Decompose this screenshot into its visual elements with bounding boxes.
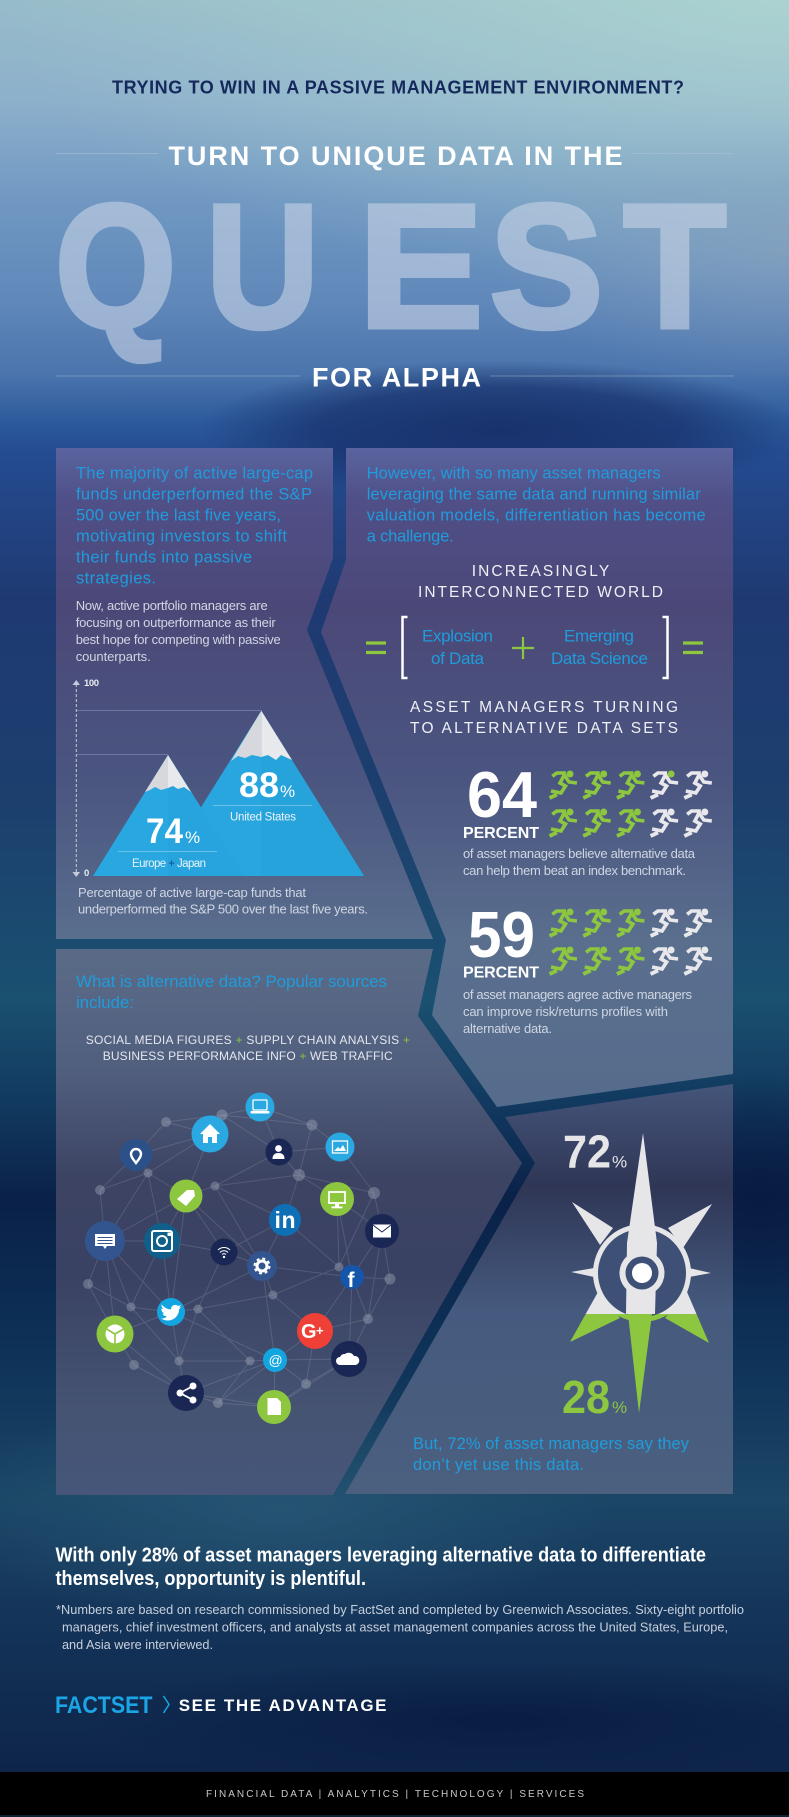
chart caption bbox=[78, 885, 368, 916]
footnote: managers, chief investment officers, and analysts at asset management companies across the United States, Europe, bbox=[62, 1620, 728, 1635]
sources list: SOCIAL MEDIA FIGURES + SUPPLY CHAIN ANALYSIS + bbox=[86, 1033, 410, 1047]
intro text left bbox=[76, 464, 313, 588]
big word QUEST: Q bbox=[55, 169, 176, 365]
intro text right: valuation models, differentiation has become bbox=[367, 506, 706, 524]
icon: home bbox=[192, 1116, 228, 1152]
big word QUEST: S bbox=[490, 168, 603, 365]
mountain: Europe + Japan 74% bbox=[93, 755, 244, 876]
icon: google plus: G bbox=[301, 1321, 317, 1343]
footer bar: FINANCIAL DATA | ANALYTICS | TECHNOLOGY | SERVICES bbox=[206, 1789, 584, 1800]
body text left: focusing on outperformance as their bbox=[76, 615, 276, 630]
icon: google plus bbox=[297, 1313, 333, 1349]
compass percentage 28: % bbox=[612, 1398, 627, 1417]
explosion of data: Explosion bbox=[422, 627, 493, 646]
mountain: Europe + Japan 74%: % bbox=[185, 828, 200, 847]
compass percentage 72: 72 bbox=[563, 1126, 611, 1178]
icon: image bbox=[326, 1132, 354, 1162]
body text left: counterparts. bbox=[76, 649, 151, 664]
top question: TRYING TO WIN IN A PASSIVE MANAGEMENT ENVIRONMENT? bbox=[112, 78, 684, 98]
big word QUEST: E bbox=[358, 168, 484, 365]
runners 59 bbox=[550, 908, 712, 974]
panel: compass bbox=[345, 1084, 733, 1494]
heading: turn to unique data: TURN TO UNIQUE DATA IN THE bbox=[168, 141, 622, 171]
mountain: United States 88%: United States bbox=[230, 812, 296, 824]
icon: box bbox=[96, 1316, 134, 1352]
conclusion bbox=[56, 1545, 706, 1590]
right bracket bbox=[662, 617, 668, 678]
icon: user bbox=[266, 1138, 292, 1166]
icon: at sign bbox=[263, 1348, 287, 1372]
intro text left: The majority of active large-cap bbox=[76, 464, 313, 482]
heading: for alpha: FOR ALPHA bbox=[312, 362, 481, 392]
intro text left: strategies. bbox=[76, 570, 156, 588]
intro text left: their funds into passive bbox=[76, 548, 252, 566]
icon: gear bbox=[247, 1251, 277, 1281]
equation bbox=[366, 617, 703, 678]
compass percentage 28: 28 bbox=[562, 1371, 610, 1423]
icon: share bbox=[168, 1375, 204, 1411]
stat: 59 percent: can improve risk/returns profiles with bbox=[463, 1004, 668, 1019]
left bracket bbox=[402, 617, 408, 678]
stat: 59 percent: alternative data. bbox=[463, 1021, 552, 1036]
question text: include: bbox=[76, 993, 134, 1012]
chart axis: 0 bbox=[84, 868, 89, 879]
subheading: interconnected world: INCREASINGLY bbox=[472, 563, 609, 580]
intro text right: leveraging the same data and running similar bbox=[367, 486, 701, 504]
stat: 59 percent: PERCENT bbox=[463, 965, 539, 982]
icon: chevron bbox=[164, 1696, 169, 1713]
subheading: alternative data sets bbox=[410, 699, 678, 737]
icon: tag bbox=[170, 1180, 202, 1212]
panel: differentiation bbox=[321, 448, 733, 1107]
question text: What is alternative data? Popular sources bbox=[76, 972, 387, 991]
explosion of data: of Data bbox=[431, 649, 485, 668]
body text left bbox=[76, 598, 281, 664]
intro text left: funds underperformed the S&P bbox=[76, 486, 312, 504]
panel: underperformance bbox=[56, 448, 433, 939]
stat: 64 percent bbox=[463, 758, 712, 878]
stat: 64 percent: 64 bbox=[467, 758, 537, 831]
footnote: and Asia were interviewed. bbox=[62, 1637, 213, 1652]
footnote: *Numbers are based on research commissioned by FactSet and completed by Greenwich Associates. Sixty-eight portfolio bbox=[56, 1602, 744, 1617]
right equals bbox=[683, 643, 703, 652]
mountain: United States 88% bbox=[158, 711, 364, 876]
chart caption: underperformed the S&P 500 over the last five years. bbox=[78, 901, 368, 916]
chart axis: 100 bbox=[84, 678, 99, 689]
mountain: Europe + Japan 74%: Europe + Japan bbox=[132, 858, 206, 870]
icon: laptop bbox=[246, 1092, 274, 1122]
network small nodes bbox=[83, 1110, 396, 1408]
left equals bbox=[366, 643, 386, 652]
big word QUEST: U bbox=[206, 169, 319, 365]
compass caption: don’t yet use this data. bbox=[413, 1456, 584, 1474]
icon: twitter bbox=[157, 1298, 185, 1326]
sources list bbox=[86, 1033, 410, 1063]
icon: google plus: + bbox=[316, 1323, 324, 1338]
stat: 64 percent: of asset managers believe alternative data bbox=[463, 846, 696, 861]
explosion of data bbox=[422, 627, 493, 668]
icon: mail bbox=[365, 1214, 399, 1248]
intro text right: a challenge. bbox=[367, 528, 454, 546]
plus bbox=[512, 637, 534, 659]
mountain: United States 88%: % bbox=[280, 782, 295, 801]
intro text left: 500 over the last five years, bbox=[76, 506, 281, 524]
subheading: interconnected world bbox=[418, 563, 663, 601]
subheading: alternative data sets: TO ALTERNATIVE DATA SETS bbox=[410, 720, 678, 737]
subheading: interconnected world: INTERCONNECTED WORLD bbox=[418, 584, 663, 601]
big word QUEST bbox=[55, 168, 726, 365]
icon: document bbox=[257, 1390, 291, 1424]
chart caption: Percentage of active large-cap funds that bbox=[78, 885, 306, 900]
icon: location pin bbox=[120, 1139, 152, 1171]
panel: alternative data bbox=[56, 949, 522, 1495]
intro text right: However, with so many asset managers bbox=[367, 464, 661, 482]
icon: facebook: f bbox=[348, 1269, 356, 1292]
icon: at sign: @ bbox=[268, 1352, 283, 1368]
stat: 59 percent: of asset managers agree active managers bbox=[463, 987, 692, 1002]
footer bar bbox=[0, 1772, 789, 1817]
stat: 64 percent: can help them beat an index benchmark. bbox=[463, 863, 686, 878]
stat: 59 percent bbox=[463, 898, 712, 1036]
network links bbox=[88, 1107, 390, 1407]
logo: factset: FACTSET bbox=[55, 1692, 153, 1719]
body text left: Now, active portfolio managers are bbox=[76, 598, 268, 613]
icon: facebook bbox=[340, 1265, 364, 1292]
intro text left: motivating investors to shift bbox=[76, 528, 287, 546]
chart axis bbox=[72, 678, 262, 879]
footnote bbox=[56, 1602, 744, 1652]
icon: cloud bbox=[331, 1341, 367, 1377]
compass percentage 72: % bbox=[612, 1152, 627, 1172]
icon: chat bbox=[85, 1221, 125, 1261]
emerging data science: Emerging bbox=[564, 627, 634, 646]
sources list: BUSINESS PERFORMANCE INFO + WEB TRAFFIC bbox=[103, 1049, 393, 1063]
big word QUEST: T bbox=[624, 168, 726, 365]
icon: linkedin: in bbox=[274, 1207, 296, 1233]
compass caption: But, 72% of asset managers say they bbox=[413, 1435, 690, 1453]
icon: linkedin bbox=[269, 1204, 301, 1236]
icon: instagram bbox=[144, 1223, 180, 1259]
network diagram bbox=[83, 1092, 399, 1424]
emerging data science: Data Science bbox=[551, 649, 648, 668]
icon: monitor bbox=[320, 1182, 354, 1216]
stat: 59 percent: 59 bbox=[468, 898, 535, 971]
subheading: alternative data sets: ASSET MANAGERS TURNING bbox=[410, 699, 678, 716]
mountain chart bbox=[72, 678, 364, 879]
intro text right bbox=[367, 464, 706, 546]
conclusion: themselves, opportunity is plentiful. bbox=[56, 1568, 366, 1590]
tagline: SEE THE ADVANTAGE bbox=[179, 1696, 386, 1715]
body text left: best hope for competing with passive bbox=[76, 632, 281, 647]
mountain: United States 88%: 88 bbox=[239, 766, 279, 805]
emerging data science bbox=[551, 627, 648, 668]
question text bbox=[76, 972, 387, 1012]
icon: wifi bbox=[210, 1238, 238, 1266]
compass bbox=[570, 1133, 712, 1413]
compass caption bbox=[413, 1435, 690, 1474]
runners 64 bbox=[550, 770, 712, 836]
stat: 64 percent: PERCENT bbox=[463, 825, 539, 842]
conclusion: With only 28% of asset managers leveraging alternative data to differentiate bbox=[56, 1545, 706, 1567]
mountain: Europe + Japan 74%: 74 bbox=[146, 812, 184, 851]
